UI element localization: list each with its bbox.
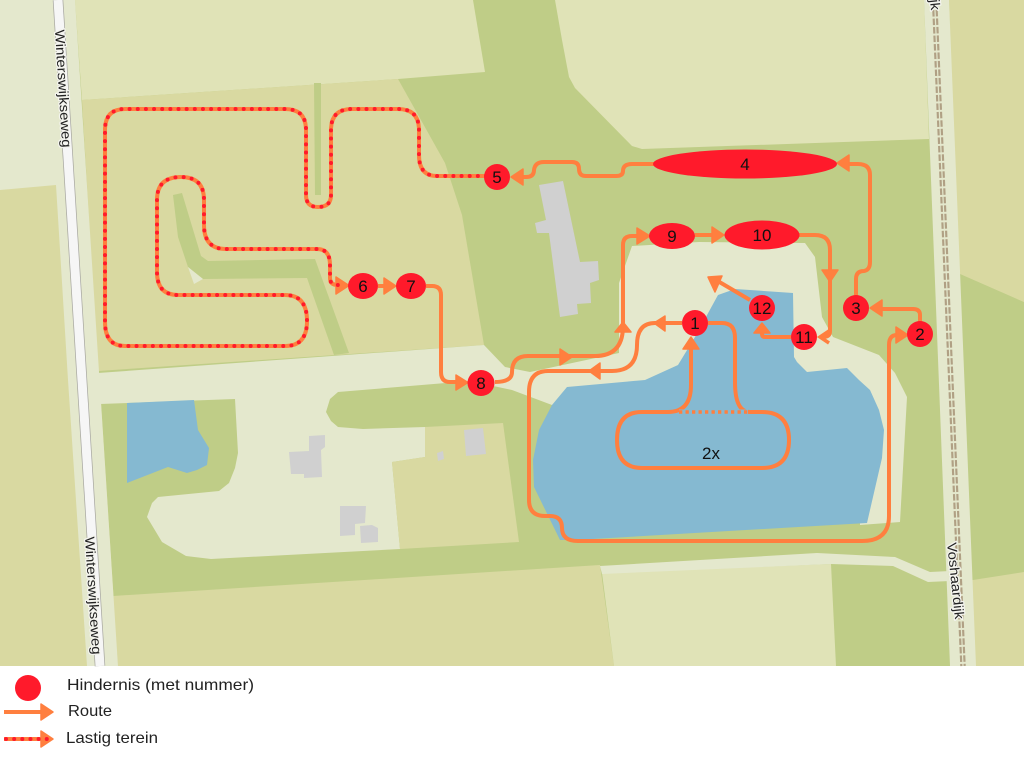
left road verge	[0, 0, 118, 666]
road label lower: Winterswijkseweg	[82, 536, 104, 655]
farm track	[600, 553, 950, 582]
obstacle 6	[348, 273, 378, 299]
field: bottom middle	[602, 564, 836, 666]
lap label 2x: 2x	[702, 444, 720, 463]
obstacle 4	[653, 150, 837, 178]
obstacle 1	[682, 310, 708, 336]
field: right top	[949, 0, 1024, 302]
legend: difficult terrain: Lastig terein	[66, 730, 158, 747]
field: route course	[82, 79, 484, 371]
legend: route: Route	[68, 703, 112, 720]
obstacle 10: 10	[753, 226, 771, 245]
obstacle 3: 3	[851, 299, 861, 318]
obstacle 7: 7	[406, 277, 416, 296]
obstacle 10	[724, 220, 800, 250]
route: 1 and outer loop to 2	[529, 316, 908, 541]
route: 12 exit arrow	[708, 276, 750, 300]
obstacle 9: 9	[667, 227, 677, 246]
legend	[4, 675, 254, 747]
obstacle 12: 12	[753, 299, 771, 318]
legend: route	[4, 703, 112, 720]
pond	[127, 400, 209, 483]
route: 6 to 7	[378, 278, 396, 294]
route: 4 to 5	[511, 162, 654, 185]
field: top right	[555, 0, 929, 149]
road label right lower: Voshaardijk	[944, 542, 967, 620]
obstacle 2	[907, 321, 933, 347]
obstacle 8: 8	[476, 374, 486, 393]
obstacle 12	[749, 295, 775, 321]
obstacle 9	[649, 223, 695, 249]
track: Voshaardijk	[935, 10, 963, 666]
green strips in the course	[173, 83, 349, 355]
obstacle 6: 6	[358, 277, 368, 296]
route: 11 to 12	[754, 323, 791, 337]
obstacle 11	[791, 324, 817, 350]
route: 9 to 10	[695, 227, 724, 243]
obstacle 7	[396, 273, 426, 299]
field: bottom left	[113, 565, 614, 666]
buildings	[289, 181, 599, 543]
right road verge	[924, 0, 976, 666]
route: 3 to 4	[837, 155, 870, 296]
obstacle 4: 4	[740, 155, 750, 174]
field: top left	[75, 0, 485, 100]
route: 2 to 3	[870, 300, 920, 322]
obstacle 11: 11	[795, 328, 813, 347]
legend: obstacle: Hindernis (met nummer)	[67, 677, 254, 694]
field: farmstead	[392, 423, 519, 549]
route: lake loop 2x	[617, 323, 789, 468]
route: 10 to 11	[799, 235, 838, 343]
lake	[533, 289, 884, 540]
road label upper: Winterswijkseweg	[52, 29, 74, 148]
obstacle 2: 2	[915, 325, 925, 344]
legend: obstacle	[15, 675, 254, 701]
obstacle 8	[468, 370, 494, 396]
route: 8 to 9	[495, 228, 650, 382]
pale ground around lake and farmstead	[98, 242, 907, 559]
route: difficult terrain section	[105, 109, 486, 346]
obstacle 5: 5	[492, 168, 502, 187]
legend: difficult terrain	[4, 730, 158, 747]
obstacle 3	[843, 295, 869, 321]
obstacle 1: 1	[690, 314, 700, 333]
route: 7 to 8	[426, 286, 468, 390]
road: Winterswijkseweg	[58, 0, 100, 666]
obstacle 5	[484, 164, 510, 190]
